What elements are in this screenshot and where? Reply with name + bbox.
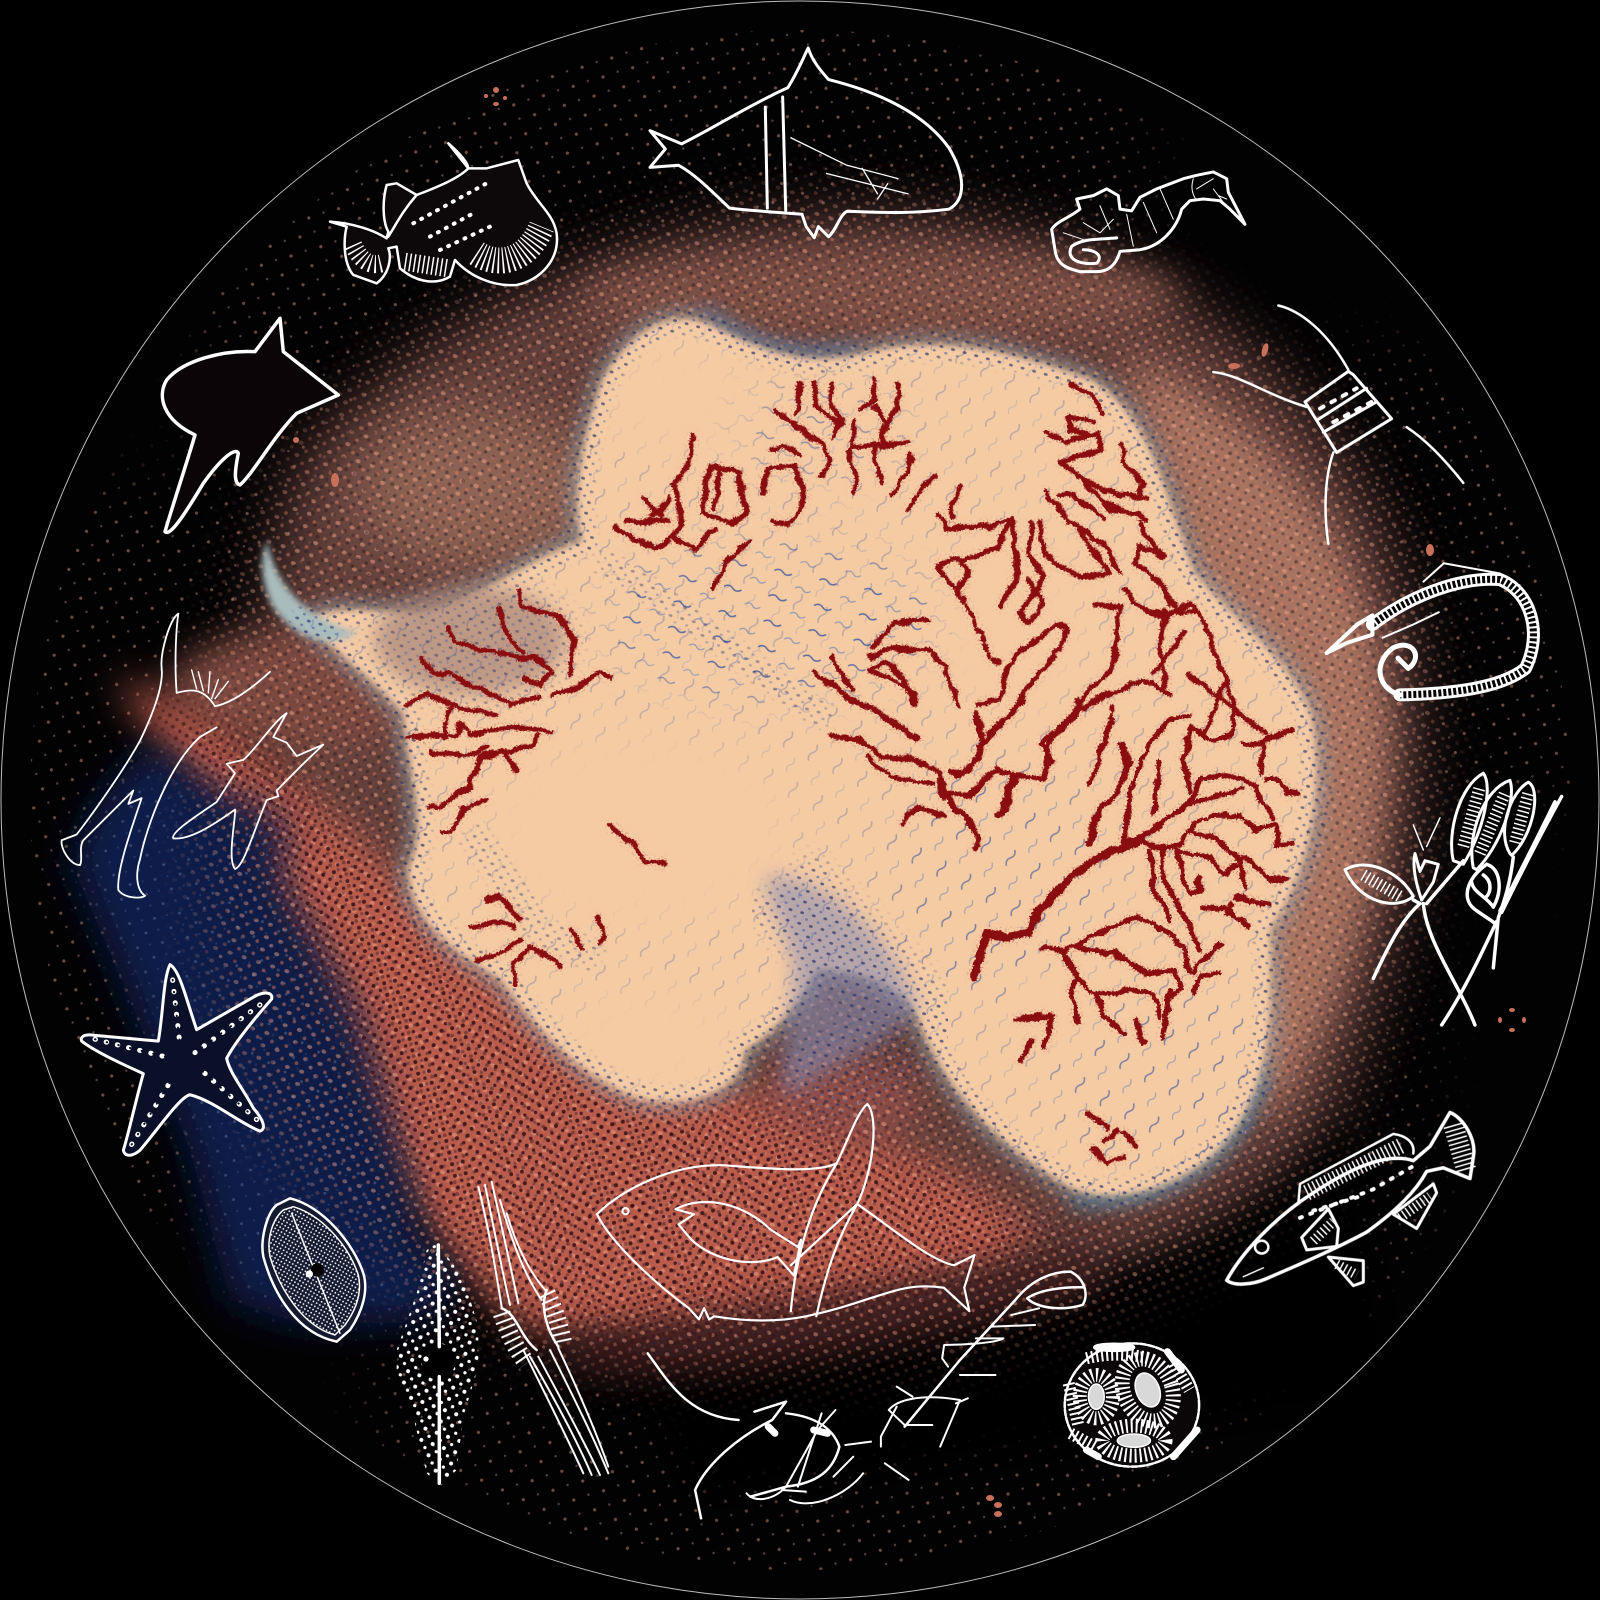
creature: sea butterfly shell	[330, 143, 557, 285]
pale continent edge	[306, 319, 1316, 1196]
navy western water	[70, 745, 460, 1323]
blue northern coast	[704, 306, 857, 351]
dark southern wash	[620, 1120, 1400, 1500]
warm northwest halo	[360, 410, 600, 570]
cream continent	[306, 319, 1316, 1196]
creature: rotifer	[1213, 305, 1463, 544]
diatom: striped ribbon	[478, 1182, 608, 1475]
creature: black dolphin shape	[162, 318, 338, 532]
creature: pipefish	[1327, 563, 1533, 695]
creature: copepod	[648, 1272, 1086, 1518]
creature: coccolithophore sphere	[1065, 1343, 1199, 1467]
creature: stickleback fish	[1227, 1112, 1474, 1286]
creature: top fish outline	[650, 48, 962, 238]
teal southeast coast	[1071, 1071, 1260, 1204]
northern horn of the continent	[262, 541, 357, 641]
creature: plant with seed pods	[1345, 773, 1562, 1025]
diatom: long dotted valve	[397, 1243, 478, 1487]
creature: seahorse	[1052, 172, 1245, 272]
diatom: oval lattice	[262, 1198, 365, 1342]
southern darker band of the salmon sea	[540, 1245, 1100, 1375]
creature: sunfish with inner fish	[597, 1104, 974, 1321]
warm eastern halo	[1122, 357, 1388, 1122]
red river network	[405, 380, 1297, 1163]
brown halo around continent	[262, 218, 1413, 1337]
salmon gulf fill	[760, 1055, 920, 1145]
river system: central and northern tributaries	[615, 380, 1200, 850]
northern warm glow	[580, 253, 1180, 337]
salmon southwest sea	[117, 680, 1040, 1332]
creature: starfish	[81, 965, 272, 1155]
creature: wolf-like figure	[61, 614, 323, 898]
small salmon rosettes and ovals	[293, 87, 1526, 1517]
mauve mottled western basin	[375, 585, 565, 695]
western reddish brown	[170, 630, 430, 750]
river system: southeast delta	[950, 700, 1297, 1047]
river system: western basin	[405, 590, 665, 985]
isolated river fragments	[1020, 612, 1265, 1163]
blue gulf wash	[765, 877, 918, 1097]
